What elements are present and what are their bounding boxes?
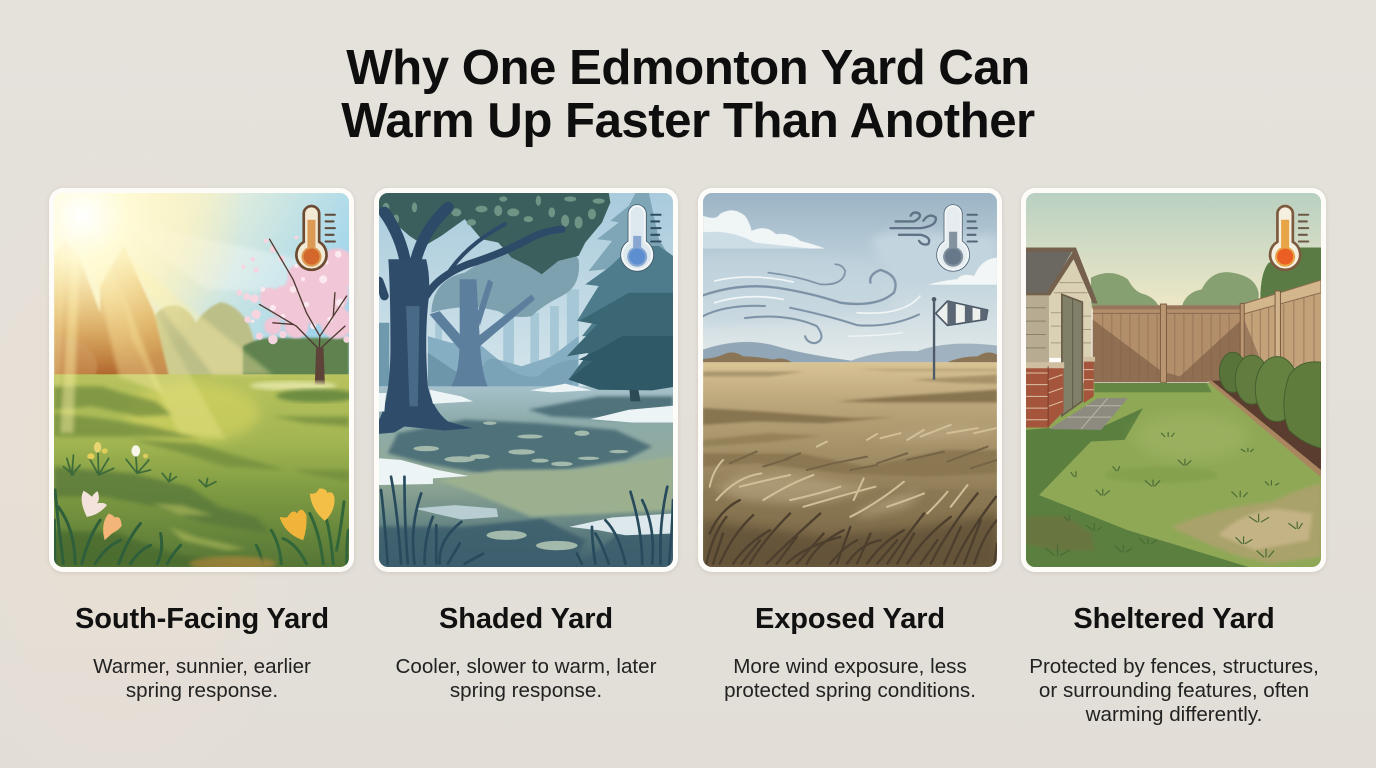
spruce tree (567, 193, 673, 401)
grass tufts and small crocuses (63, 452, 216, 487)
blossom highlights (251, 251, 344, 329)
wind swirls (703, 264, 920, 343)
crocus white and peach (82, 491, 122, 540)
thermometer: warm (1270, 206, 1308, 270)
small crocus buds (87, 442, 148, 459)
trunk (315, 348, 325, 385)
right fence (1240, 280, 1321, 382)
title: Warm Up Faster Than Another (341, 93, 1035, 148)
lawn light tufts (152, 503, 246, 550)
dark foreground grass (706, 447, 997, 564)
panel: exposed yard illustration (698, 188, 1002, 572)
thermometer: warm (296, 206, 335, 270)
fallen petals (249, 381, 337, 390)
distant forest (379, 289, 579, 386)
tree shadow (276, 389, 357, 402)
lawn light variation (1135, 413, 1249, 460)
warm soil glow (189, 556, 276, 571)
shed front wall (1049, 259, 1092, 358)
shed (1026, 248, 1098, 428)
distant trees (152, 302, 349, 376)
panel: sheltered yard illustration (1021, 188, 1326, 572)
main canopy (379, 193, 610, 274)
panel: shaded yard illustration (374, 188, 678, 572)
text: shaded description: Cooler, slower to warm, later (396, 655, 656, 678)
wind icon (891, 212, 936, 245)
shed brick base (1026, 366, 1064, 428)
oak branches (379, 207, 562, 296)
thermometer: cool (622, 206, 661, 270)
text: shaded description: spring response. (450, 679, 602, 702)
light grass strokes (710, 425, 996, 517)
sky (54, 193, 349, 380)
soil shade at bottom (703, 513, 997, 567)
text: sheltered description: or surrounding features, often (1039, 679, 1309, 702)
sunlit grass (438, 457, 673, 517)
sun rays (54, 219, 349, 440)
lawn darker band (1104, 467, 1218, 483)
shed side wall (1026, 295, 1049, 363)
field dark bands (703, 369, 997, 567)
lawn (1026, 383, 1321, 567)
text: sheltered description: Protected by fences, structures, (1029, 655, 1319, 678)
haze clouds (703, 232, 997, 326)
sky (379, 193, 673, 394)
title (341, 40, 1035, 148)
tree shadows on lawn (54, 386, 349, 567)
mid canopy (431, 246, 579, 317)
ground (379, 386, 673, 567)
lawn shade strip (1094, 383, 1212, 392)
moss highlights (413, 421, 628, 550)
foreground grass blades (381, 477, 673, 564)
text: shaded description (396, 204, 1224, 702)
blossom speckles (236, 235, 350, 344)
clouds (703, 210, 997, 285)
shed door (1062, 294, 1082, 416)
shaded lawn left and bottom (1026, 408, 1249, 567)
shade patch (379, 396, 673, 567)
leaves (383, 196, 605, 228)
foreground grass blades left (54, 490, 181, 564)
mulch bed and edging (1207, 381, 1321, 477)
title: Why One Edmonton Yard Can (346, 40, 1030, 95)
background trees (1091, 248, 1321, 308)
grass tufts (1046, 433, 1302, 557)
branches (259, 239, 347, 383)
text: exposed description: protected spring conditions. (724, 679, 976, 702)
text: sheltered description: warming differently. (1086, 703, 1262, 726)
snow patches (379, 384, 673, 535)
hedge (1219, 352, 1321, 448)
text: exposed description: More wind exposure, less (733, 655, 967, 678)
main oak tree (379, 207, 562, 434)
dirt patch (1026, 483, 1321, 564)
heading: shaded yard: Shaded Yard (439, 603, 613, 635)
far tree (430, 279, 535, 393)
text: south-facing description (93, 655, 311, 702)
foreground grass blades right (256, 502, 348, 564)
heading: sheltered yard: Sheltered Yard (1073, 603, 1275, 635)
sun (54, 193, 262, 380)
cherry tree (236, 235, 357, 385)
heading: south-facing yard: South-Facing Yard (75, 603, 329, 635)
lawn (54, 374, 349, 567)
sky (703, 193, 997, 364)
lawn glow (125, 383, 259, 443)
distant scrub (703, 352, 997, 362)
panel: south-facing yard illustration (49, 188, 354, 572)
heading: exposed yard: Exposed Yard (755, 603, 945, 635)
blossom mass (259, 249, 357, 339)
field (703, 362, 997, 567)
text: south-facing description: Warmer, sunnier, earlier (93, 655, 311, 678)
sky (1026, 193, 1321, 310)
text: exposed description (280, 210, 997, 702)
thermometer: neutral (938, 206, 977, 270)
hills (703, 342, 997, 362)
oak trunk (379, 259, 473, 434)
stone path (1049, 398, 1128, 430)
back fence (1093, 304, 1242, 382)
light grass patches (713, 425, 996, 517)
text: sheltered description (1029, 655, 1319, 726)
shed roof (1026, 248, 1074, 294)
text: south-facing description: spring response. (126, 679, 278, 702)
sunlit conifers and bush (54, 239, 169, 386)
crocus yellow (280, 488, 335, 540)
windsock (932, 297, 988, 380)
